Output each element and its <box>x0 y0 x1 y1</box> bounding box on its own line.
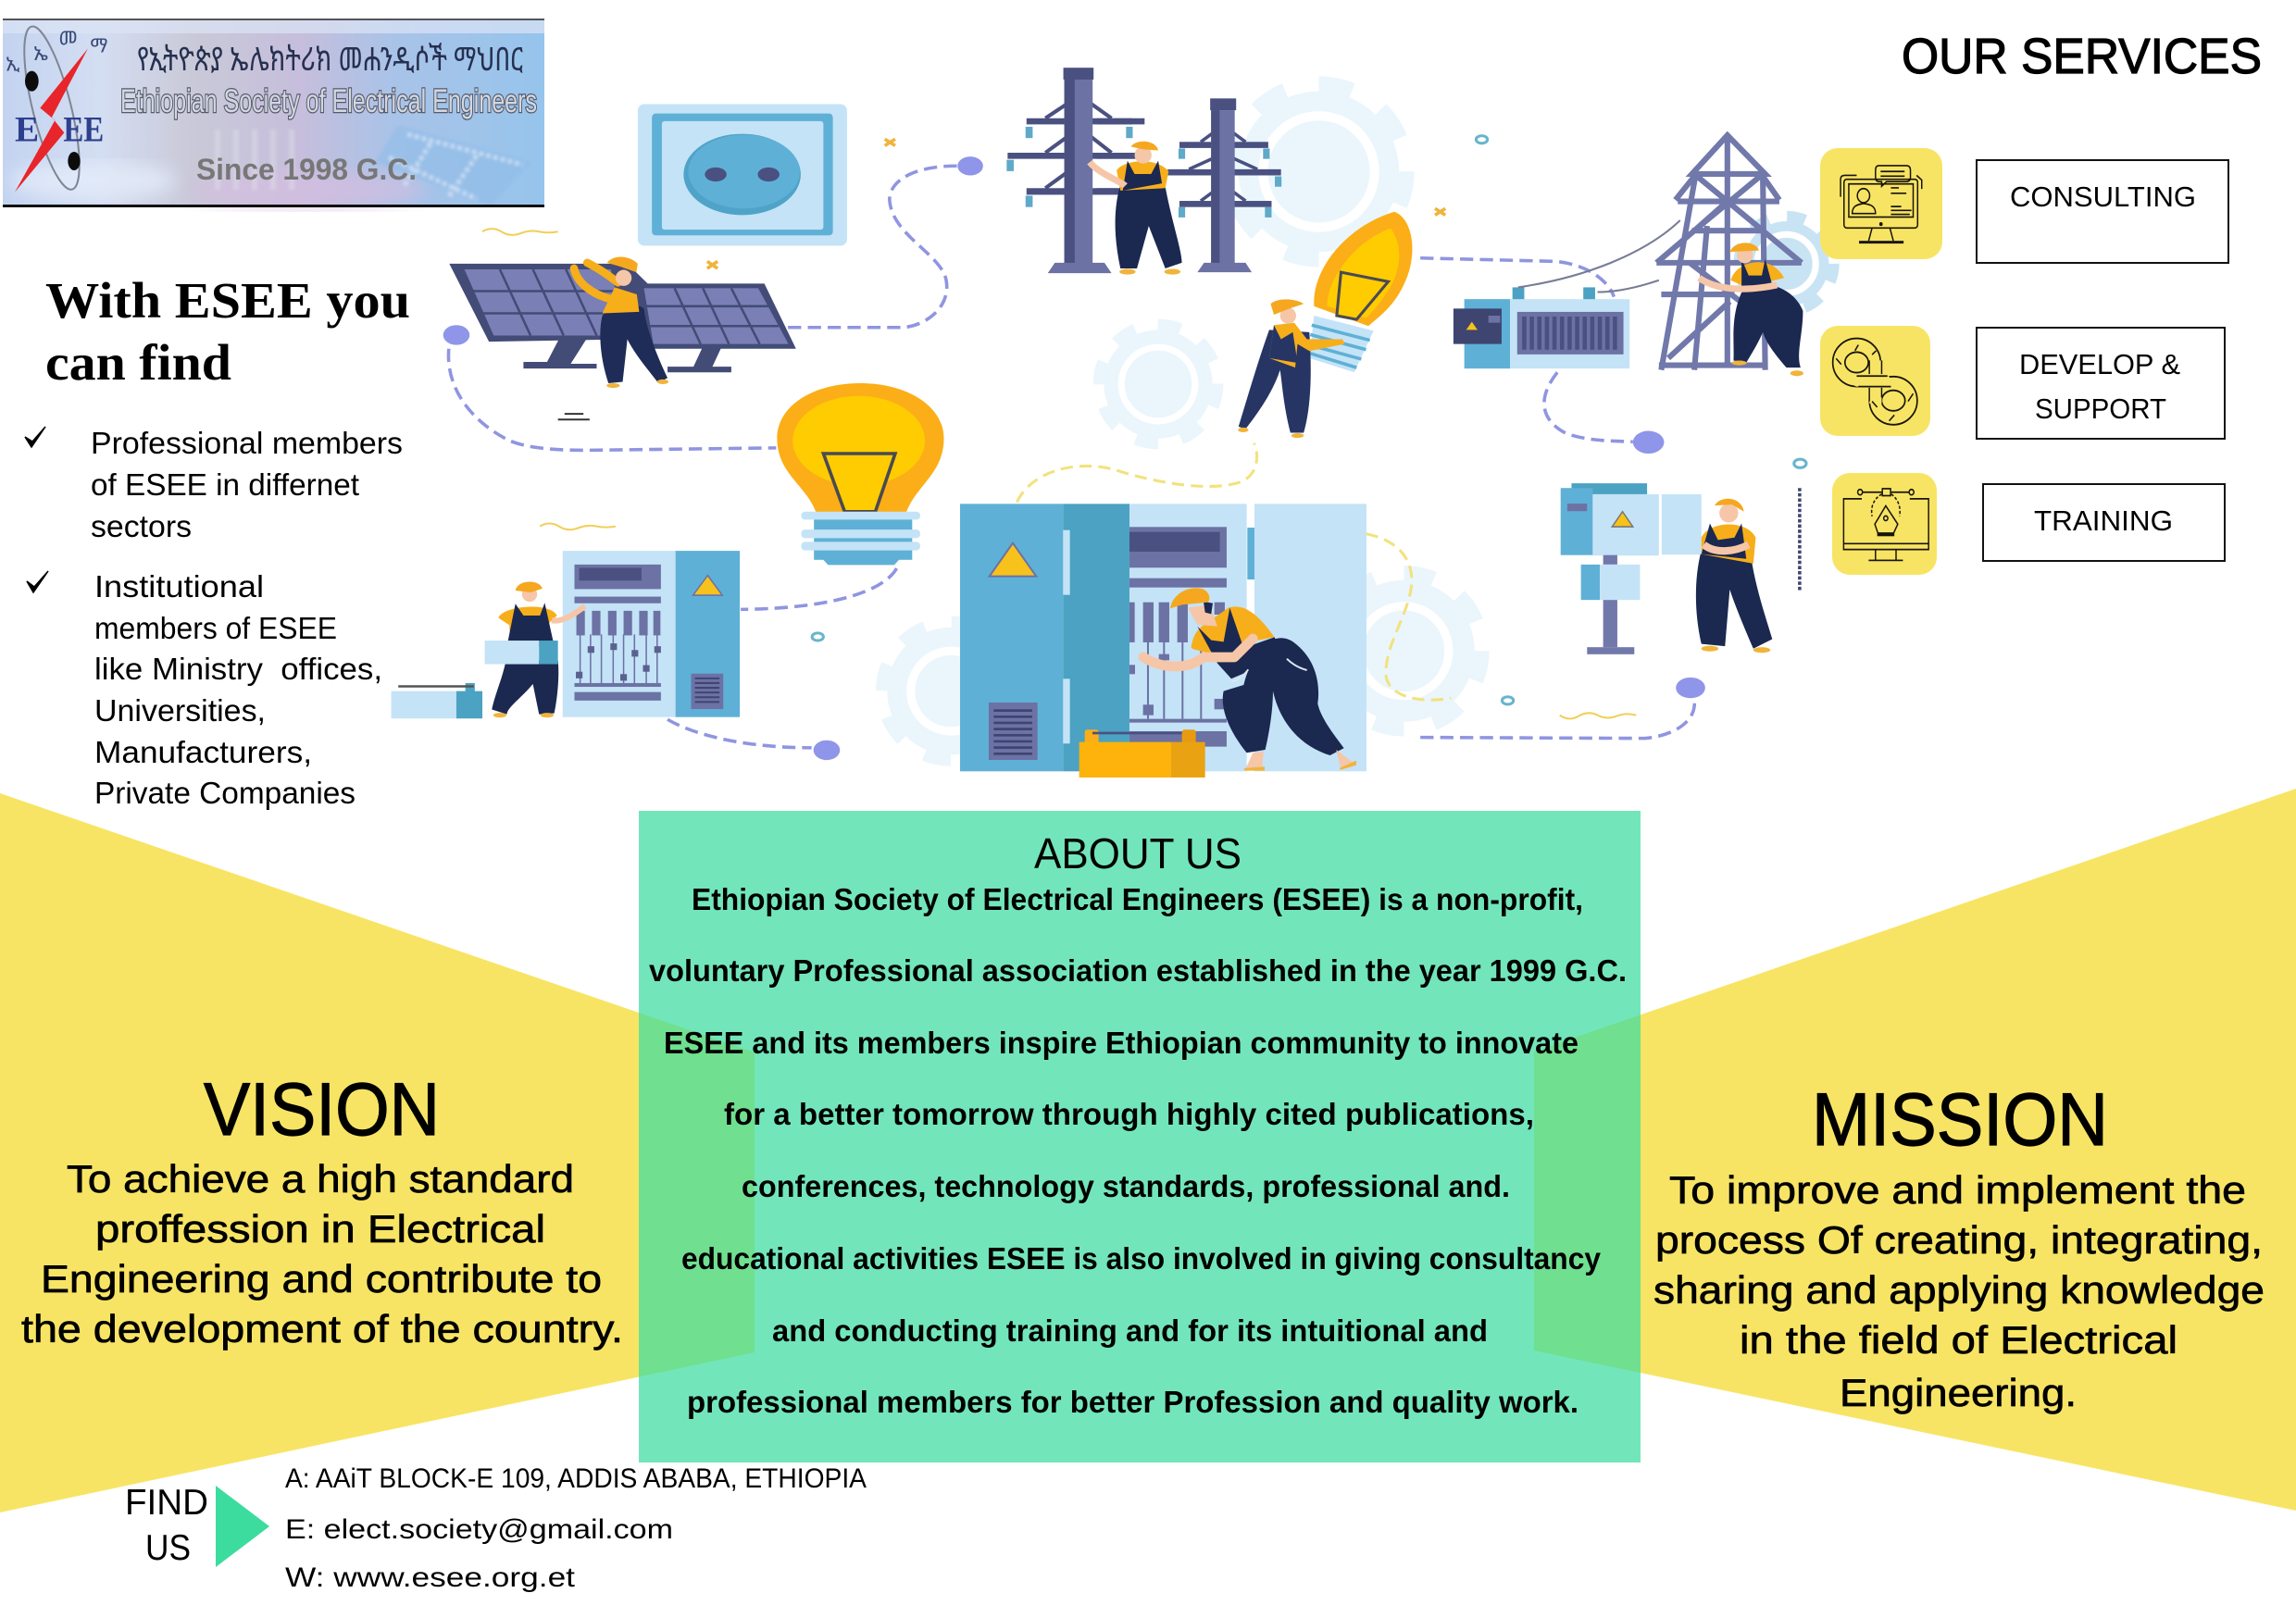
junction box on pole <box>1561 483 1702 654</box>
find us label: FIND <box>125 1483 208 1523</box>
decorative marks right <box>1435 136 1806 718</box>
service icon: training <box>1832 473 1937 575</box>
illustration: right half <box>1017 84 1834 739</box>
worker between pylons <box>1090 142 1182 275</box>
logo emblem: ኤ <box>33 40 48 67</box>
vision text: proffession in Electrical <box>95 1207 545 1251</box>
about us panel <box>639 811 1641 1462</box>
vision text <box>21 1068 623 1350</box>
worker holding bulb <box>1238 299 1345 438</box>
contact details <box>285 1463 867 1593</box>
service icon: consulting <box>1820 148 1942 259</box>
decorative marks <box>482 139 895 641</box>
checklist: institutional members: Institutional <box>94 569 264 604</box>
about us body text: ESEE and its members inspire Ethiopian community to innovate <box>664 1026 1578 1060</box>
first pylon <box>1006 68 1149 273</box>
heading: our services: OUR SERVICES <box>1902 29 2262 84</box>
cabinet body <box>960 504 1366 771</box>
dashed connector: cabinet to node <box>668 719 840 760</box>
checklist: professional members <box>25 426 403 543</box>
mission text: Engineering. <box>1840 1371 2077 1414</box>
dashed connector: bulb to cabinet <box>741 568 896 609</box>
main electrical cabinet with worker <box>960 504 1366 778</box>
yellow toolbox <box>1079 729 1205 778</box>
logo since date: Since 1998 G.C. <box>196 153 417 186</box>
contact details: E: elect.society@gmail.com <box>285 1514 673 1545</box>
service icon: develop and support <box>1820 326 1930 436</box>
logo banner <box>3 19 544 208</box>
vision text: To achieve a high standard <box>67 1157 574 1201</box>
big worker <box>1143 588 1356 771</box>
dashed connector: solar to tower <box>788 156 983 328</box>
tilted lightbulb <box>1309 212 1412 372</box>
checklist: institutional members: Universities, <box>94 693 266 728</box>
service box: training <box>1983 484 2225 561</box>
checklist: institutional members: Private Companies <box>94 776 356 810</box>
about us body text: for a better tomorrow through highly cited publications, <box>724 1097 1534 1131</box>
contact details: W: www.esee.org.et <box>285 1562 576 1593</box>
logo emblem: ኢ <box>6 51 19 78</box>
transformer <box>1454 220 1680 368</box>
dashed connector bottom right <box>1420 678 1705 739</box>
yellow dashed connector right <box>1366 534 1451 700</box>
mission text: sharing and applying knowledge <box>1653 1268 2265 1312</box>
heading: with ESEE you can find <box>45 272 410 391</box>
dashed connector: bulb to transformer <box>1420 258 1614 297</box>
about us body text: and conducting training and for its intuitional and <box>772 1313 1488 1348</box>
about us body text: professional members for better Profession and quality work. <box>687 1385 1578 1419</box>
gear beside main cabinet <box>1326 573 1482 728</box>
checklist: professional members: sectors <box>91 509 192 543</box>
yellow vision panel <box>0 793 755 1512</box>
vision text: VISION <box>204 1068 440 1151</box>
left control cabinet <box>563 551 740 717</box>
dashed connector: solar to bulb <box>443 325 776 450</box>
logo emblem: EE <box>63 108 104 149</box>
service box: training: TRAINING <box>2034 504 2173 537</box>
gear behind lattice tower <box>1740 217 1834 311</box>
mission text: To improve and implement the <box>1669 1168 2246 1212</box>
mission text: MISSION <box>1812 1078 2108 1162</box>
dashed connector: transformer to node <box>1544 372 1664 454</box>
service box: develop and support: SUPPORT <box>2035 392 2166 425</box>
about us body text: conferences, technology standards, professional and. <box>742 1169 1510 1203</box>
second pylon <box>1097 98 1281 272</box>
checklist: institutional members: like Ministry offices, <box>94 652 382 686</box>
solar panel <box>449 264 796 372</box>
checklist: professional members: of ESEE in differnet <box>91 467 359 502</box>
toolbox on floor <box>392 683 482 718</box>
mission text: process Of creating, integrating, <box>1655 1218 2263 1262</box>
checklist: institutional members <box>27 569 382 810</box>
service box: consulting <box>1977 160 2228 263</box>
logo emblem: መ <box>58 24 78 51</box>
checklist: institutional members: members of ESEE <box>94 611 337 645</box>
worker at junction box <box>1696 499 1772 653</box>
yellow mission panel <box>1534 789 2296 1511</box>
logo emblem: E <box>15 108 39 149</box>
heading: with ESEE you can find: With ESEE you <box>45 272 410 329</box>
logo emblem: ማ <box>90 32 107 59</box>
about us body text: voluntary Professional association established in the year 1999 G.C. <box>649 953 1627 988</box>
about us heading: ABOUT US <box>1034 829 1242 877</box>
vision text: Engineering and contribute to <box>41 1257 602 1301</box>
service box: consulting: CONSULTING <box>2010 180 2196 213</box>
middle gear <box>1099 325 1217 443</box>
wall socket <box>638 104 847 246</box>
service box: develop and support: DEVELOP & <box>2019 348 2180 380</box>
gear behind main cabinet <box>882 623 1019 760</box>
heading: with ESEE you can find: can find <box>45 334 231 391</box>
lattice tower <box>1656 135 1802 370</box>
about us body text: educational activities ESEE is also involved in giving consultancy <box>681 1241 1602 1276</box>
vision text: the development of the country. <box>21 1307 623 1350</box>
find us label: US <box>145 1528 191 1568</box>
service box: develop and support <box>1977 328 2225 439</box>
worker on lattice tower <box>1699 243 1803 376</box>
worker with solar panel <box>574 256 668 388</box>
logo emblem <box>6 22 107 194</box>
logo amharic name: የኢትዮጵያ ኤሌክትሪክ መሐንዲሶች ማህበር <box>137 37 523 81</box>
contact details: A: AAiT BLOCK-E 109, ADDIS ABABA, ETHIOPIA <box>285 1463 867 1494</box>
arrow: find us <box>216 1486 269 1567</box>
checklist: institutional members: Manufacturers, <box>94 735 312 769</box>
about us body text: Ethiopian Society of Electrical Engineers (ESEE) is a non-profit, <box>692 882 1583 916</box>
yellow dashed connector top <box>1017 443 1257 503</box>
large gear behind pylon <box>1231 84 1406 259</box>
logo english name: Ethiopian Society of Electrical Engineers <box>120 83 537 119</box>
mission text <box>1653 1078 2265 1414</box>
big lightbulb <box>777 383 943 565</box>
checklist: professional members: Professional members <box>91 426 403 460</box>
find us label <box>125 1483 208 1568</box>
mission text: in the field of Electrical <box>1740 1318 2177 1362</box>
about us body text <box>649 882 1627 1419</box>
worker at left cabinet <box>485 581 585 717</box>
illustration: left half <box>392 68 1149 760</box>
